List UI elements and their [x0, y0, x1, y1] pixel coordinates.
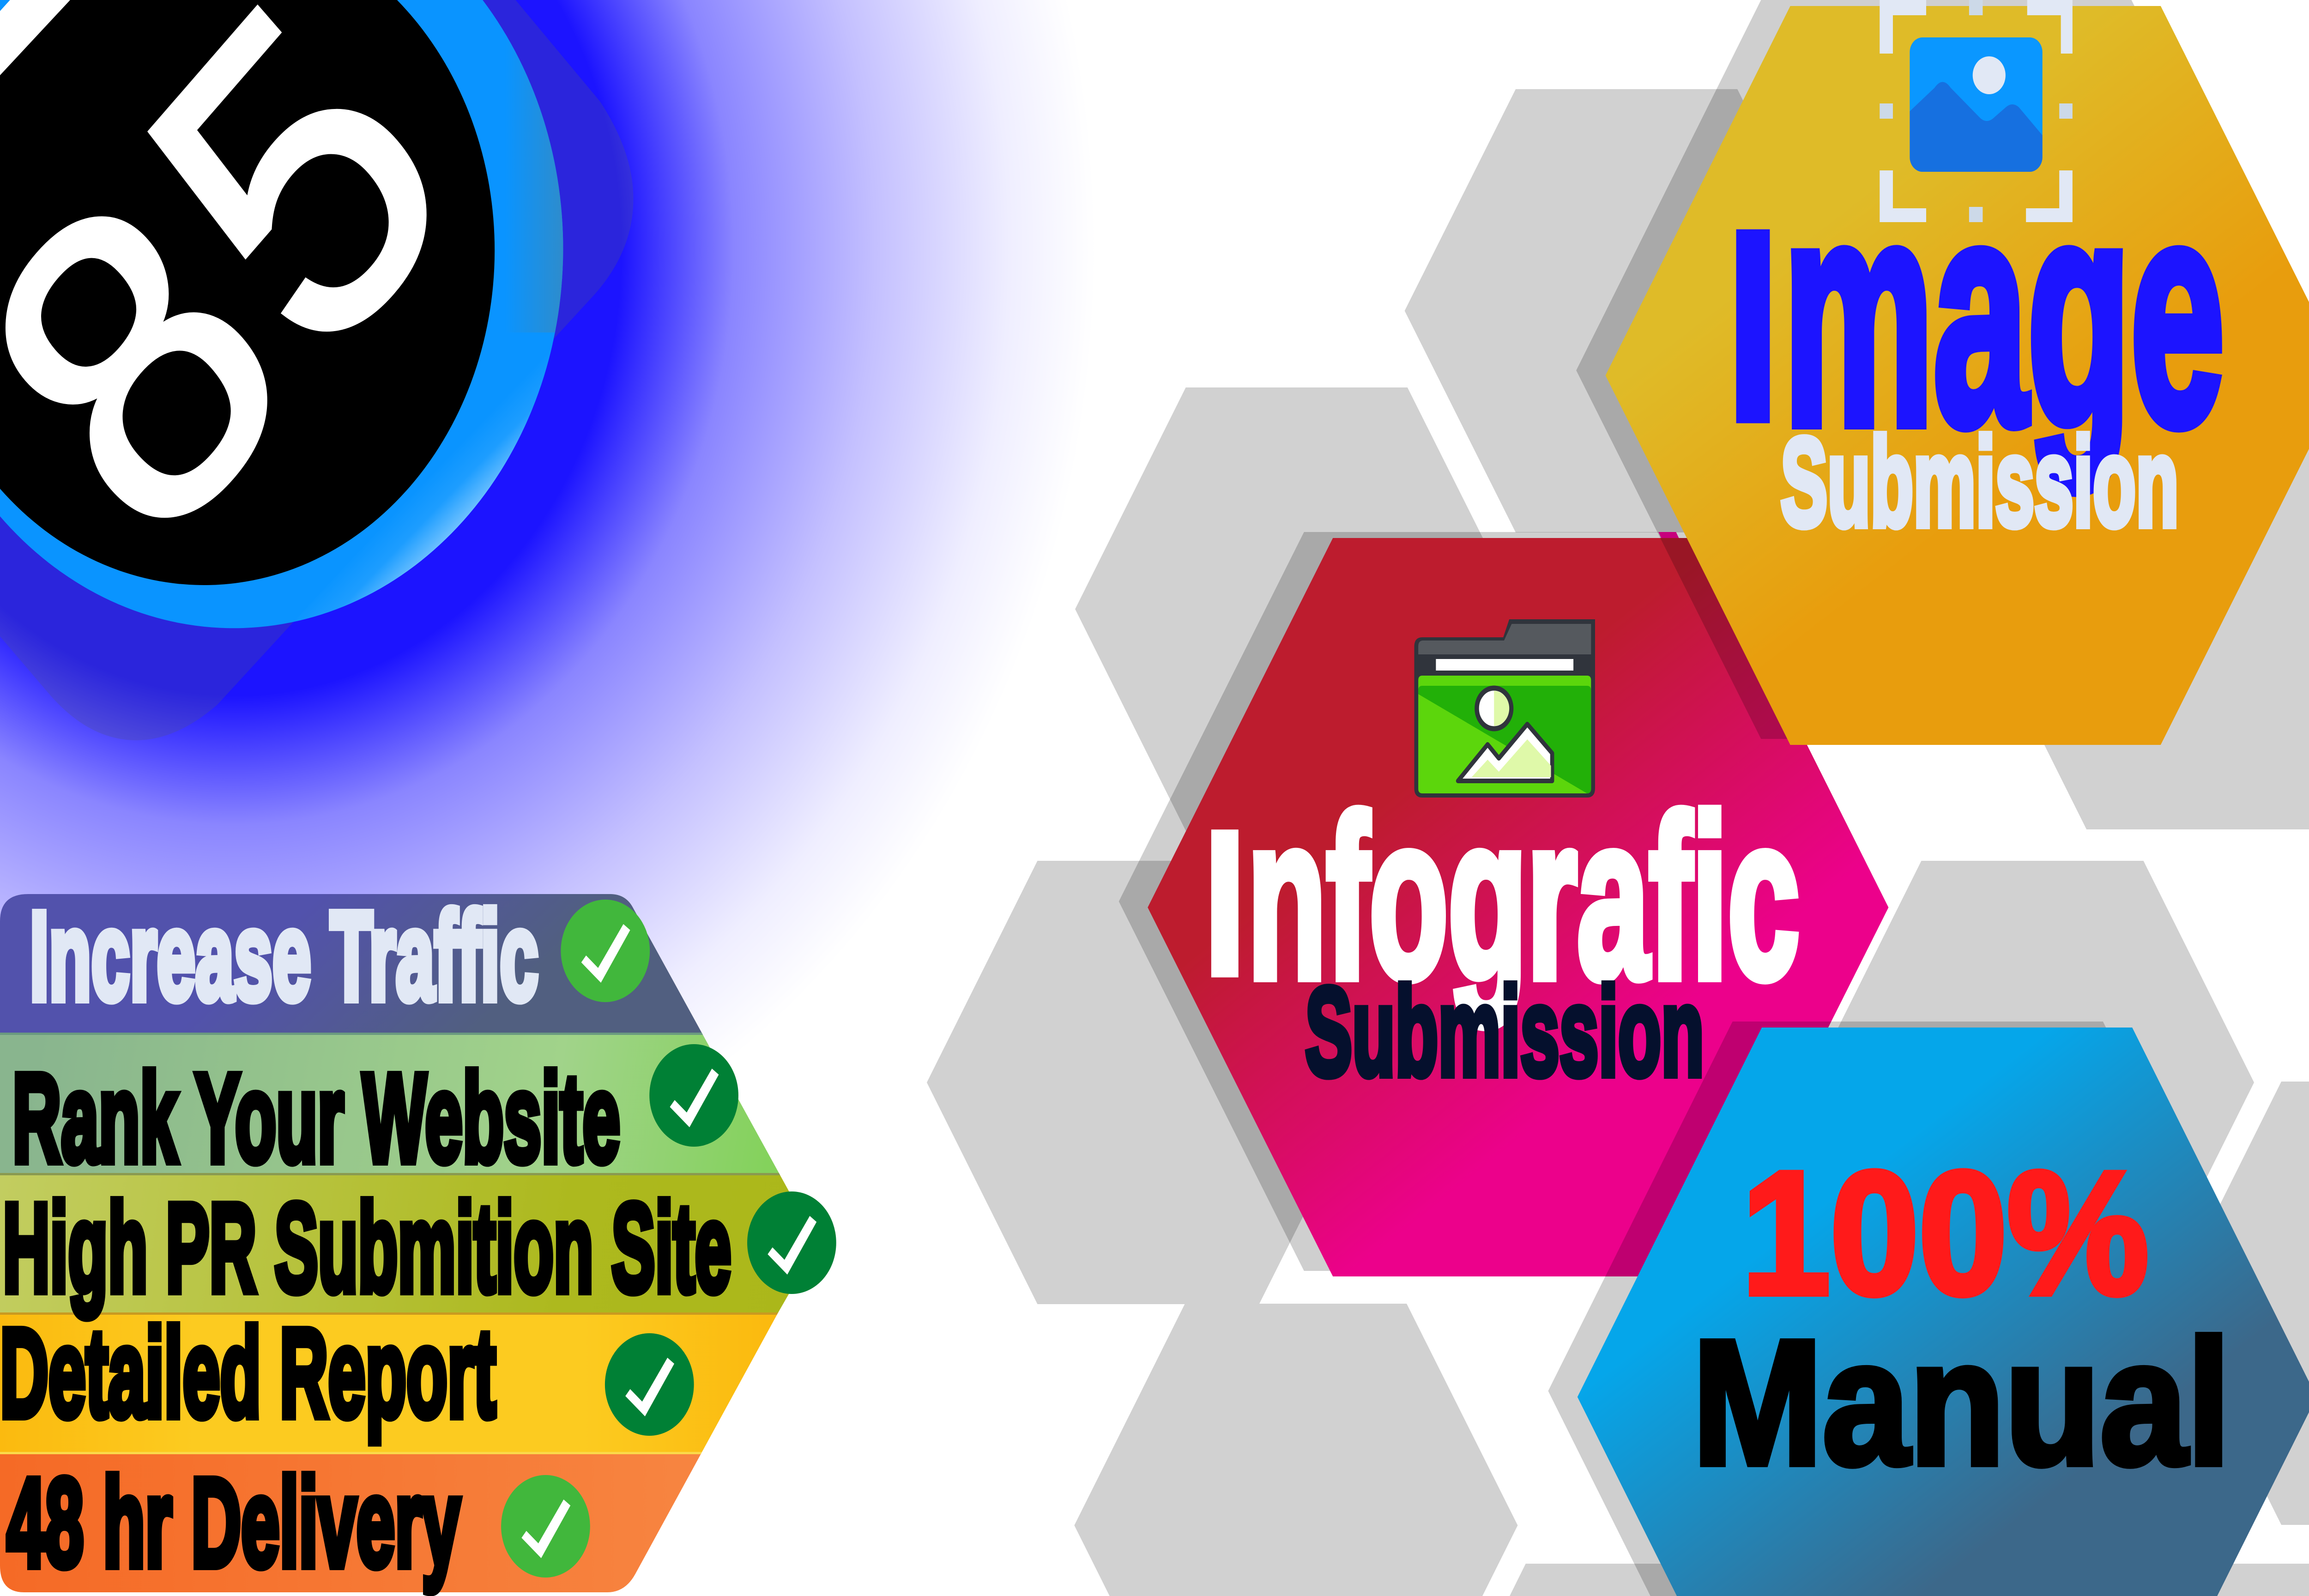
- hexagon: manual shadow: [1548, 1022, 2287, 1596]
- hexagon: infografic shadow: [1119, 532, 1860, 1271]
- row: High PR Submition Site: High PR Submition Site: [3, 1177, 731, 1318]
- subheading: Submission: Submission: [1305, 961, 1704, 1102]
- check icon: [605, 1333, 694, 1436]
- heading: 100%: 100%: [1742, 1136, 2149, 1331]
- check icon: [561, 900, 650, 1002]
- hexagon: infografic: [1148, 538, 1888, 1276]
- badge outer ring: [0, 0, 563, 628]
- grey background hexagons: [927, 89, 2309, 1596]
- row: High PR Submition Site: [3, 1177, 836, 1318]
- badge: 85: [0, 0, 581, 670]
- panel: benefits list: [0, 885, 842, 1596]
- panel: manual content: [1692, 1136, 2230, 1502]
- panel: image content: [1721, 0, 2224, 552]
- row: Increase Traffic: Increase Traffic: [30, 885, 538, 1026]
- row: Detailed Report: Detailed Report: [0, 1302, 496, 1443]
- icon: folder with picture: [1414, 619, 1595, 798]
- heading: Manual: Manual: [1692, 1304, 2230, 1502]
- badge cut-off stripe: [0, 0, 70, 75]
- badge black disc: [0, 0, 495, 585]
- check icon: [649, 1044, 738, 1147]
- check icon: [501, 1475, 590, 1578]
- icon: picture with selection brackets: [1880, 0, 2073, 222]
- heading: Image: I: [1721, 169, 1785, 483]
- hexagon: image: [1606, 6, 2309, 745]
- pink sliver: [1658, 532, 1679, 538]
- row: Rank Your Website: Rank Your Website: [12, 1047, 620, 1188]
- hexagon: image shadow: [1576, 0, 2309, 739]
- heading: Infografic: I: [1199, 784, 1251, 1023]
- row: 48 hr Delivery: 48 hr Delivery: [7, 1452, 460, 1593]
- band backgrounds: [0, 891, 842, 1596]
- panel: infografic content: [1199, 619, 1800, 1102]
- badge shadow shape: [0, 0, 634, 740]
- hexagon: manual: [1578, 1028, 2309, 1596]
- heading: Infografic: nfografic: [1247, 768, 1800, 1028]
- heading: Infografic: [1199, 768, 1800, 1028]
- check icon: [747, 1191, 836, 1294]
- ring rim shading: [297, 33, 563, 621]
